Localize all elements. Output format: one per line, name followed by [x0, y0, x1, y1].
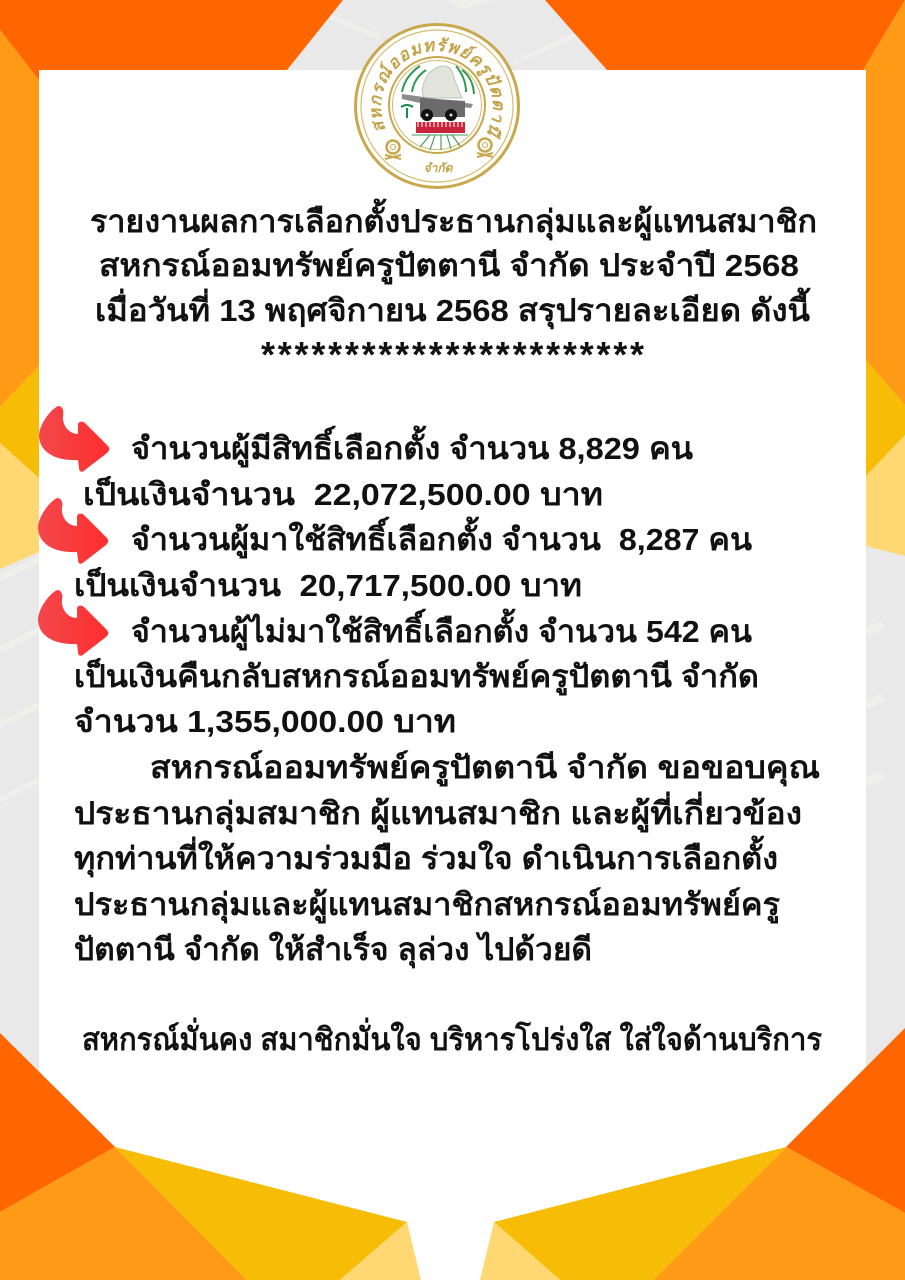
title: ***********************: [261, 334, 644, 375]
thank-you paragraph: ปัตตานี จำกัด ให้สำเร็จ ลุล่วง ไปด้วยดี: [74, 930, 592, 969]
statistic: eligible voters: [83, 425, 693, 512]
logo: cooperative seal: [354, 23, 520, 189]
background: bottom left shapes: [0, 1033, 421, 1280]
title: เมื่อวันที่ 13 พฤศจิกายน 2568 สรุปรายละเอียด ดังนี้: [95, 287, 811, 330]
icon: left emblem: [385, 140, 401, 159]
statistic: non-voters: เป็นเงินคืนกลับสหกรณ์ออมทรัพย์ครูปัตตานี จำกัด: [74, 657, 759, 696]
statistic: voters who voted: จำนวนผู้มาใช้สิทธิ์เลือกตั้ง จำนวน 8,287 คน: [131, 516, 752, 559]
title: [90, 198, 817, 375]
background: top right orange shape: [545, 0, 905, 556]
title: รายงานผลการเลือกตั้งประธานกลุ่มและผู้แทนสมาชิก: [90, 198, 817, 241]
statistic: voters who voted: เป็นเงินจำนวน 20,717,500.00 บาท: [74, 566, 582, 603]
arrow icon 2: [38, 498, 108, 564]
arrow icon 1: [39, 406, 109, 472]
statistic: voters who voted: [74, 516, 752, 603]
thank-you paragraph: [74, 750, 820, 969]
thank-you paragraph: ทุกท่านที่ให้ความร่วมมือ ร่วมใจ ดำเนินการเลือกตั้ง: [74, 835, 778, 878]
thank-you paragraph: ประธานกลุ่มสมาชิก ผู้แทนสมาชิก และผู้ที่เกี่ยวข้อง: [74, 791, 802, 833]
icon: cannon: [402, 94, 473, 121]
background: top left orange shape: [0, 0, 343, 569]
thank-you paragraph: สหกรณ์ออมทรัพย์ครูปัตตานี จำกัด ขอขอบคุณ: [150, 750, 820, 787]
icon: mountain and foliage: [401, 66, 474, 118]
slogan: สหกรณ์มั่นคง สมาชิกมั่นใจ บริหารโปร่งใส ใส่ใจด้านบริการ: [82, 1017, 822, 1057]
statistic: eligible voters: จำนวนผู้มีสิทธิ์เลือกตั้ง จำนวน 8,829 คน: [131, 425, 693, 468]
statistic: non-voters: จำนวน 1,355,000.00 บาท: [74, 704, 456, 739]
arrow icon 3: [38, 590, 108, 656]
thank-you paragraph: ประธานกลุ่มและผู้แทนสมาชิกสหกรณ์ออมทรัพย์ครู: [74, 887, 780, 924]
logo: cooperative seal: สหกรณ์ออมทรัพย์ครูปัตตานี: [371, 37, 503, 140]
logo: cooperative seal: จำกัด: [424, 161, 454, 175]
title: สหกรณ์ออมทรัพย์ครูปัตตานี จำกัด ประจำปี 2568: [99, 248, 799, 285]
icon: right emblem: [477, 138, 493, 157]
statistic: non-voters: จำนวนผู้ไม่มาใช้สิทธิ์เลือกตั้ง จำนวน 542 คน: [131, 608, 752, 651]
icon: red base: [412, 122, 468, 150]
statistic: eligible voters: เป็นเงินจำนวน 22,072,500.00 บาท: [83, 475, 603, 512]
statistic: non-voters: [74, 608, 759, 739]
background: bottom right shapes: [480, 1028, 905, 1280]
